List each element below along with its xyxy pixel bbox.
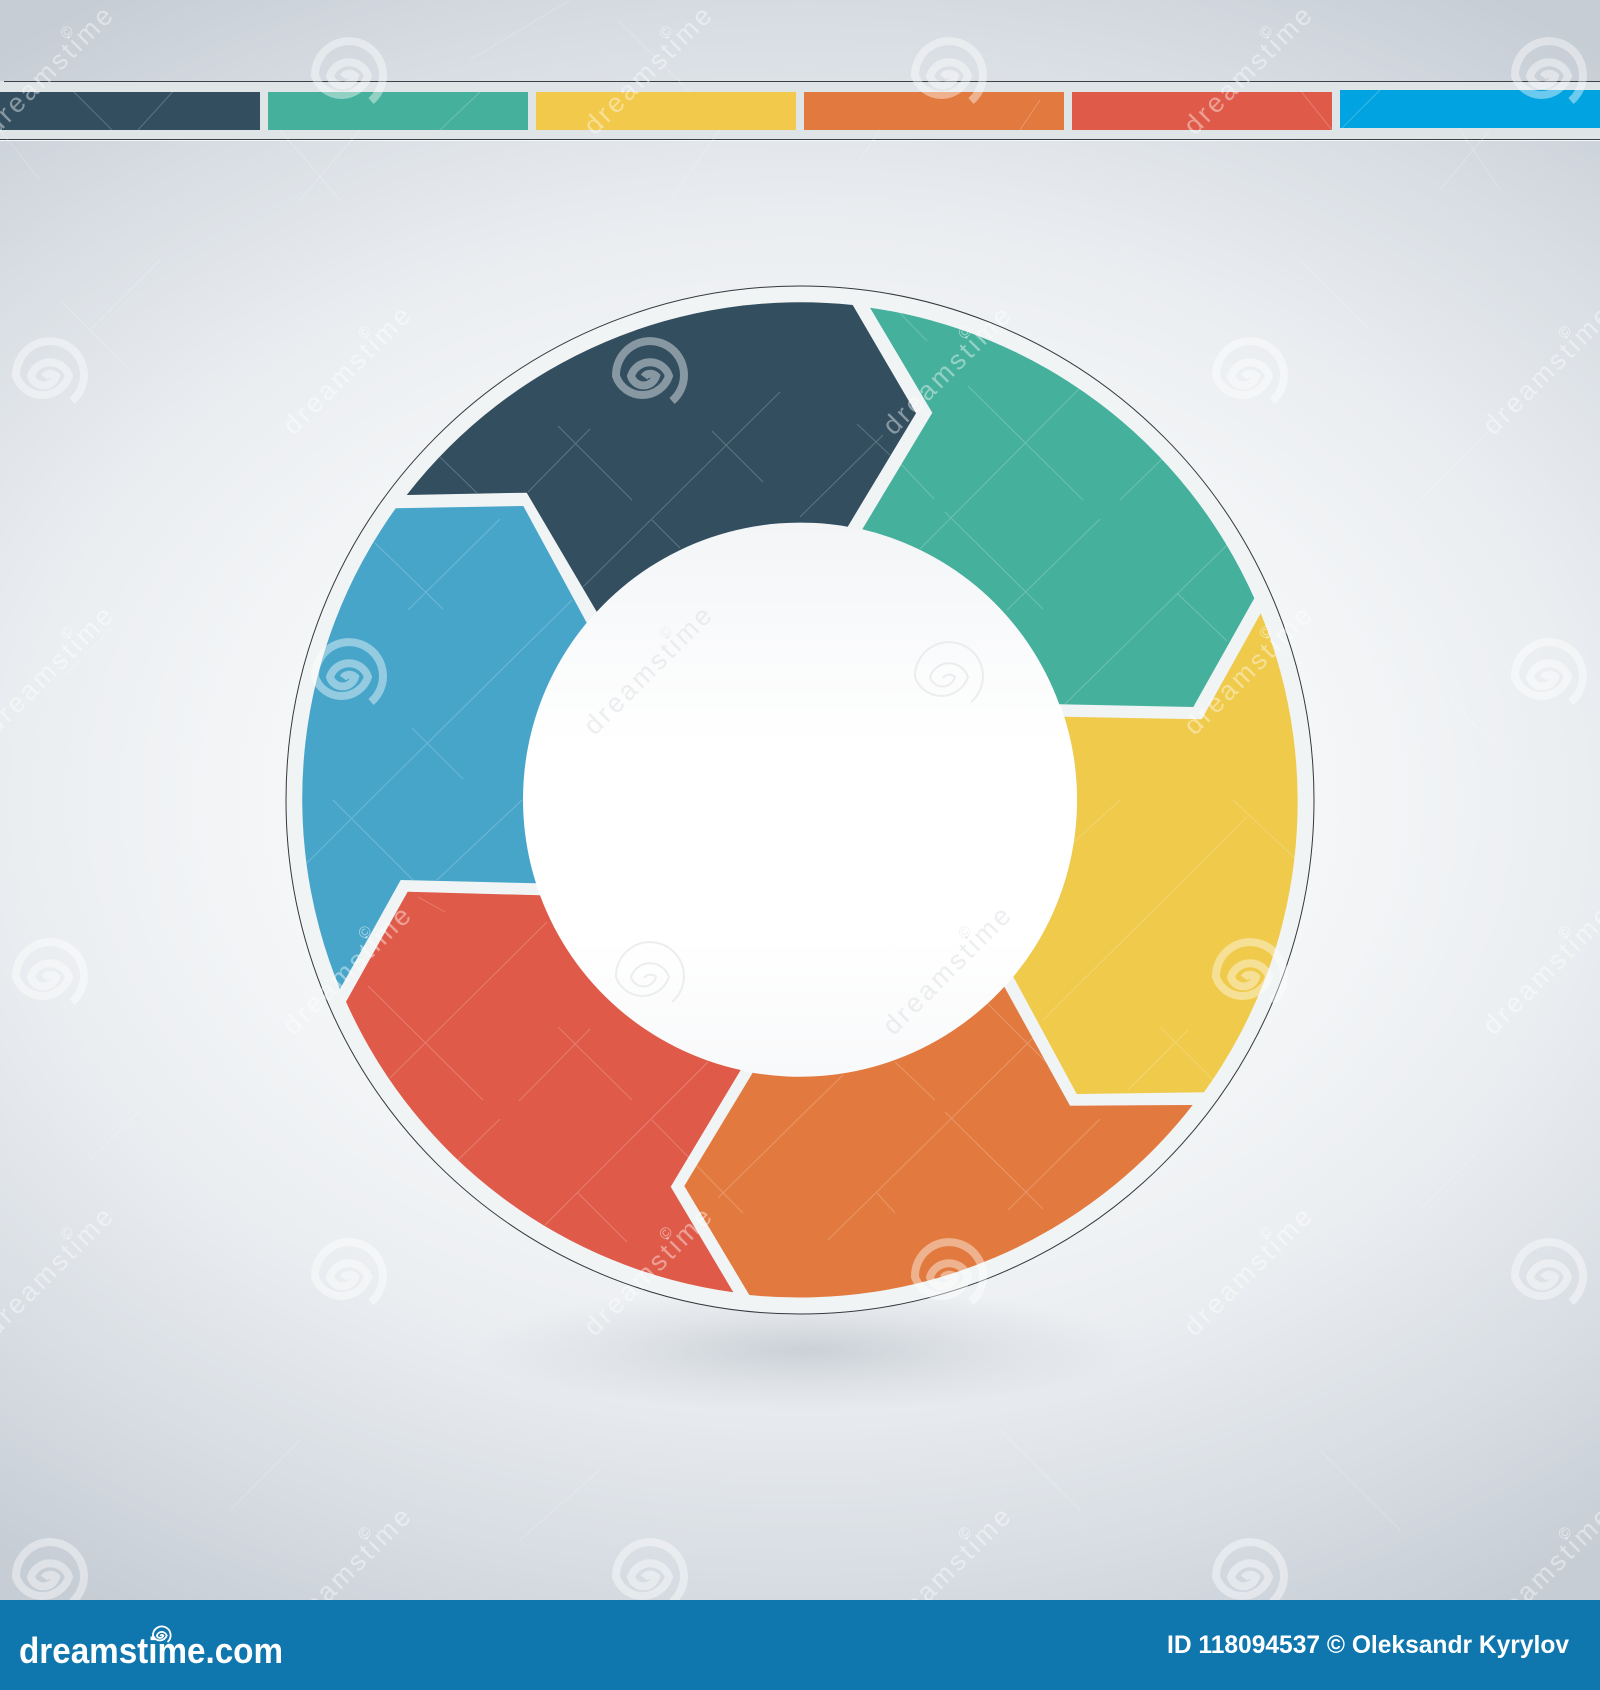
colour strip legend <box>0 81 1600 141</box>
footer logo text: dreamstime.com <box>19 1630 283 1671</box>
watermark text: © <box>1555 922 1576 943</box>
segment: yellow arrow <box>1013 613 1298 1094</box>
watermark text: © <box>57 622 78 643</box>
watermark text: dreamstime <box>1178 1 1318 141</box>
watermark text: © <box>955 322 976 343</box>
watermark text: © <box>1256 622 1277 643</box>
footer credit: ID 118094537 © Oleksandr Kyrylov <box>1167 1631 1569 1659</box>
watermark text: dreamstime <box>1178 1202 1318 1342</box>
watermark text: dreamstime <box>877 301 1017 441</box>
watermark text: dreamstime <box>578 1202 718 1342</box>
footer logo spiral <box>153 1626 171 1642</box>
watermark text: dreamstime <box>578 1 718 141</box>
circle outline and ring base <box>286 286 1314 1314</box>
watermark spirals on centre circle <box>616 642 983 1002</box>
watermark text: dreamstime <box>277 901 417 1041</box>
segment: blue arrow <box>302 506 587 989</box>
watermark text: © <box>57 1223 78 1244</box>
segment: teal arrow <box>862 308 1254 707</box>
watermark text: dreamstime <box>578 601 718 741</box>
centre circle <box>523 523 1077 1077</box>
watermark text: © <box>1256 22 1277 43</box>
watermark text: dreamstime <box>277 301 417 441</box>
watermark text: © <box>656 22 677 43</box>
footer bar <box>0 1600 1600 1690</box>
watermark text: © <box>355 1523 376 1544</box>
watermark text: © <box>656 1223 677 1244</box>
watermark text: dreamstime <box>877 901 1017 1041</box>
watermark text: © <box>1256 1223 1277 1244</box>
watermark text: © <box>355 322 376 343</box>
watermark text: © <box>955 922 976 943</box>
watermark text: © <box>355 922 376 943</box>
watermark text: © <box>1555 1523 1576 1544</box>
segment: orange arrow <box>684 987 1193 1298</box>
watermark text: © <box>1555 322 1576 343</box>
segment: red arrow <box>346 892 741 1292</box>
watermark text: © <box>656 622 677 643</box>
ground shadow <box>475 1288 1135 1412</box>
watermark text: dreamstime <box>277 1502 417 1642</box>
watermark text: © <box>955 1523 976 1544</box>
segment: navy arrow <box>407 302 916 612</box>
arrow ring <box>302 302 1298 1298</box>
watermark text: dreamstime <box>877 1502 1017 1642</box>
watermark text: © <box>57 22 78 43</box>
watermark text: dreamstime <box>1178 601 1318 741</box>
